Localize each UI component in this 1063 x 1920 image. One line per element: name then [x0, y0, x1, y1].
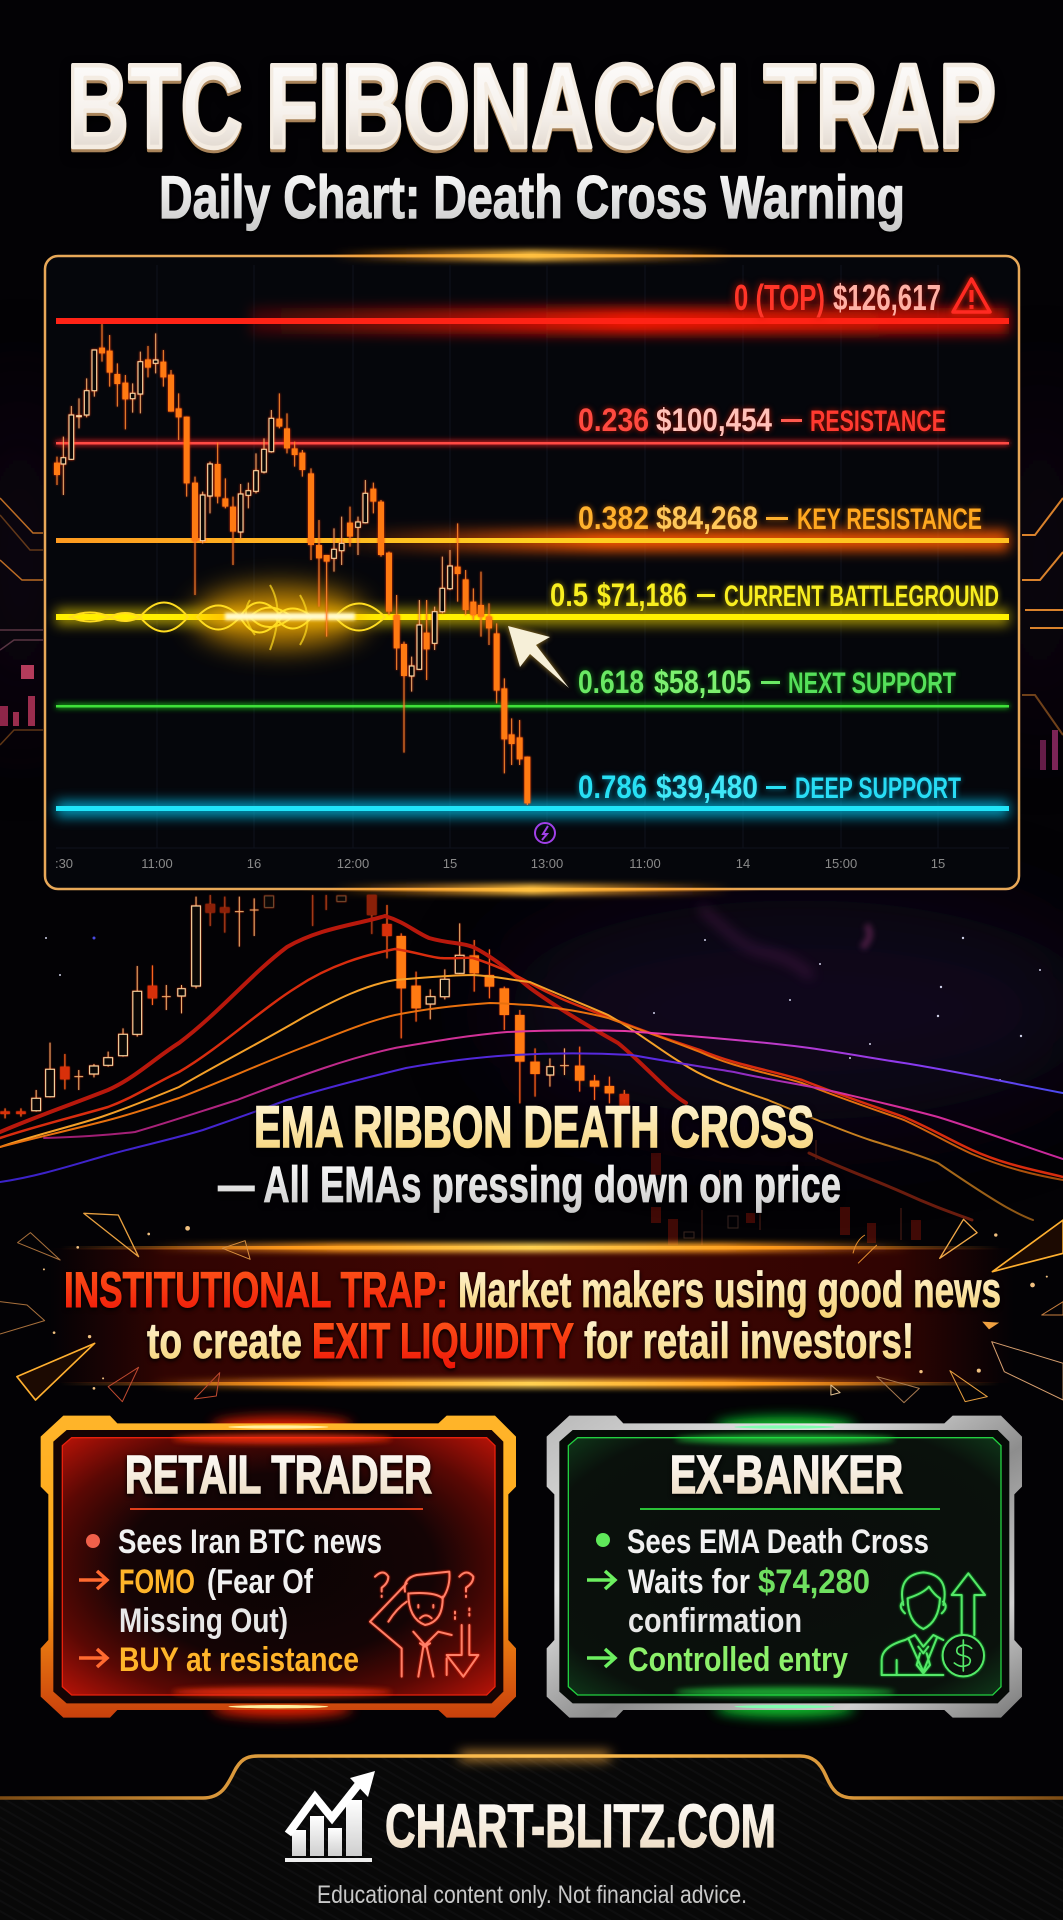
electric pulse on 0.5 line [70, 585, 385, 650]
nebula and stars [45, 907, 1041, 1081]
banner line two: to create [147, 1313, 302, 1369]
label 0.236 [578, 402, 946, 438]
label 0.382: $84,268 [656, 500, 758, 536]
icon: banker with coin and up arrow [882, 1572, 985, 1676]
fib line 0.618 [56, 704, 1009, 708]
card glow [212, 1417, 352, 1717]
footer background [0, 1756, 1063, 1920]
chart: faded candles below ribbon [651, 1140, 921, 1245]
label 0.618: 0.618 [578, 664, 644, 700]
retail bullet list: Sees Iran BTC news [118, 1523, 382, 1561]
label 0.5: 0.5 [550, 577, 588, 613]
fib line 0.236 [56, 441, 1009, 445]
panel frame [45, 256, 1019, 889]
banner line one [64, 1262, 1001, 1318]
fib line 0.786 [56, 801, 1009, 817]
banner line two [147, 1313, 914, 1369]
retail bullet list: (Fear Of [207, 1563, 314, 1601]
card frame [547, 1416, 1022, 1718]
card heading: RETAIL TRADER [125, 1445, 432, 1505]
inner top and bottom red glow [172, 1434, 392, 1697]
time axis labels: 12:00 [337, 856, 369, 871]
heading: EMA ribbon death cross: EMA RIBBON DEATH CROSS [254, 1095, 814, 1160]
label 0.236: 0.236 [578, 402, 649, 438]
banker bullet list: Controlled entry [628, 1641, 848, 1679]
card divider [130, 1508, 423, 1510]
label 0.236: $100,454 [656, 402, 772, 438]
label 0.382: 0.382 [578, 500, 649, 536]
time axis labels: :30 [55, 856, 73, 871]
disclaimer: Educational content only. Not financial advice. [317, 1881, 747, 1909]
time axis labels: 15:00 [825, 856, 857, 871]
label 0.236: RESISTANCE [810, 405, 946, 438]
label 0.382 [578, 500, 982, 536]
label 0.786: DEEP SUPPORT [795, 772, 961, 805]
retail bullet list: FOMO [119, 1563, 195, 1601]
arrow pointing at current level [508, 626, 569, 688]
card frame [41, 1416, 516, 1718]
icon: stressed trader [370, 1572, 478, 1677]
banker bullet list [587, 1523, 929, 1679]
panel: fibonacci chart [45, 250, 1019, 895]
time axis labels: 13:00 [531, 856, 563, 871]
chart: EMA ribbon curves [0, 916, 1063, 1220]
card heading: EX-BANKER [670, 1445, 903, 1505]
label 0.786: 0.786 [578, 769, 647, 805]
time axis labels: 16 [247, 856, 261, 871]
icon: warning triangle [953, 279, 990, 312]
time axis labels [55, 856, 945, 871]
glass shards right [831, 1219, 1063, 1403]
time axis labels: 14 [736, 856, 750, 871]
time axis labels: 15 [443, 856, 457, 871]
label 0.786 [578, 769, 961, 805]
time axis labels: 11:00 [629, 856, 661, 871]
label 0.786: $39,480 [656, 769, 758, 805]
retail bullet list [79, 1523, 382, 1679]
time axis labels: 11:00 [141, 856, 173, 871]
candlesticks [57, 324, 527, 805]
label 0.618 [578, 664, 956, 700]
label 0 top: $126,617 [833, 277, 941, 318]
right circuit decoration [1022, 498, 1063, 770]
logo: rising chart [285, 1771, 375, 1862]
retail bullet list: BUY at resistance [119, 1641, 359, 1679]
panel: ex-banker card [547, 1416, 1022, 1718]
label 0 top: 0 (TOP) [734, 277, 825, 318]
brand name: CHART-BLITZ.COM [385, 1792, 776, 1860]
glass shards left [0, 1213, 250, 1402]
panel: retail trader card [41, 1416, 516, 1718]
banner line one: INSTITUTIONAL TRAP: [64, 1262, 448, 1318]
icon: lightning marker [535, 823, 555, 843]
banker bullet list: confirmation [628, 1602, 802, 1640]
label 0.618: NEXT SUPPORT [788, 667, 956, 700]
subheading: EMAs pressing down: — All EMAs pressing down on price [218, 1156, 841, 1213]
chart: EMA ribbon candlesticks [5, 895, 624, 1118]
label 0.5 [550, 577, 999, 613]
banker bullet list: Sees EMA Death Cross [627, 1523, 929, 1561]
banker bullet list: $74,280 [758, 1563, 870, 1601]
inner top and bottom green glow [675, 1434, 895, 1697]
footer gold line [0, 1756, 1063, 1798]
card divider [640, 1508, 940, 1510]
retail bullet list: Missing Out) [119, 1602, 288, 1640]
banner line two: for retail investors! [584, 1313, 914, 1369]
card glow [715, 1417, 855, 1717]
fib line 0 top [56, 308, 1009, 334]
banker bullet list: Waits for [628, 1563, 750, 1601]
label 0.382: KEY RESISTANCE [797, 503, 982, 536]
label 0.618: $58,105 [654, 664, 751, 700]
time axis labels: 15 [931, 856, 945, 871]
banner: institutional trap [50, 1243, 1013, 1388]
label 0 top [734, 277, 941, 318]
fib line 0.5 [56, 609, 1009, 625]
label 0.5: $71,186 [597, 577, 687, 613]
banner line two: EXIT LIQUIDITY [312, 1313, 574, 1369]
fib line 0.382 [56, 530, 1009, 551]
footer [0, 1756, 1063, 1920]
left circuit decoration [0, 498, 43, 745]
